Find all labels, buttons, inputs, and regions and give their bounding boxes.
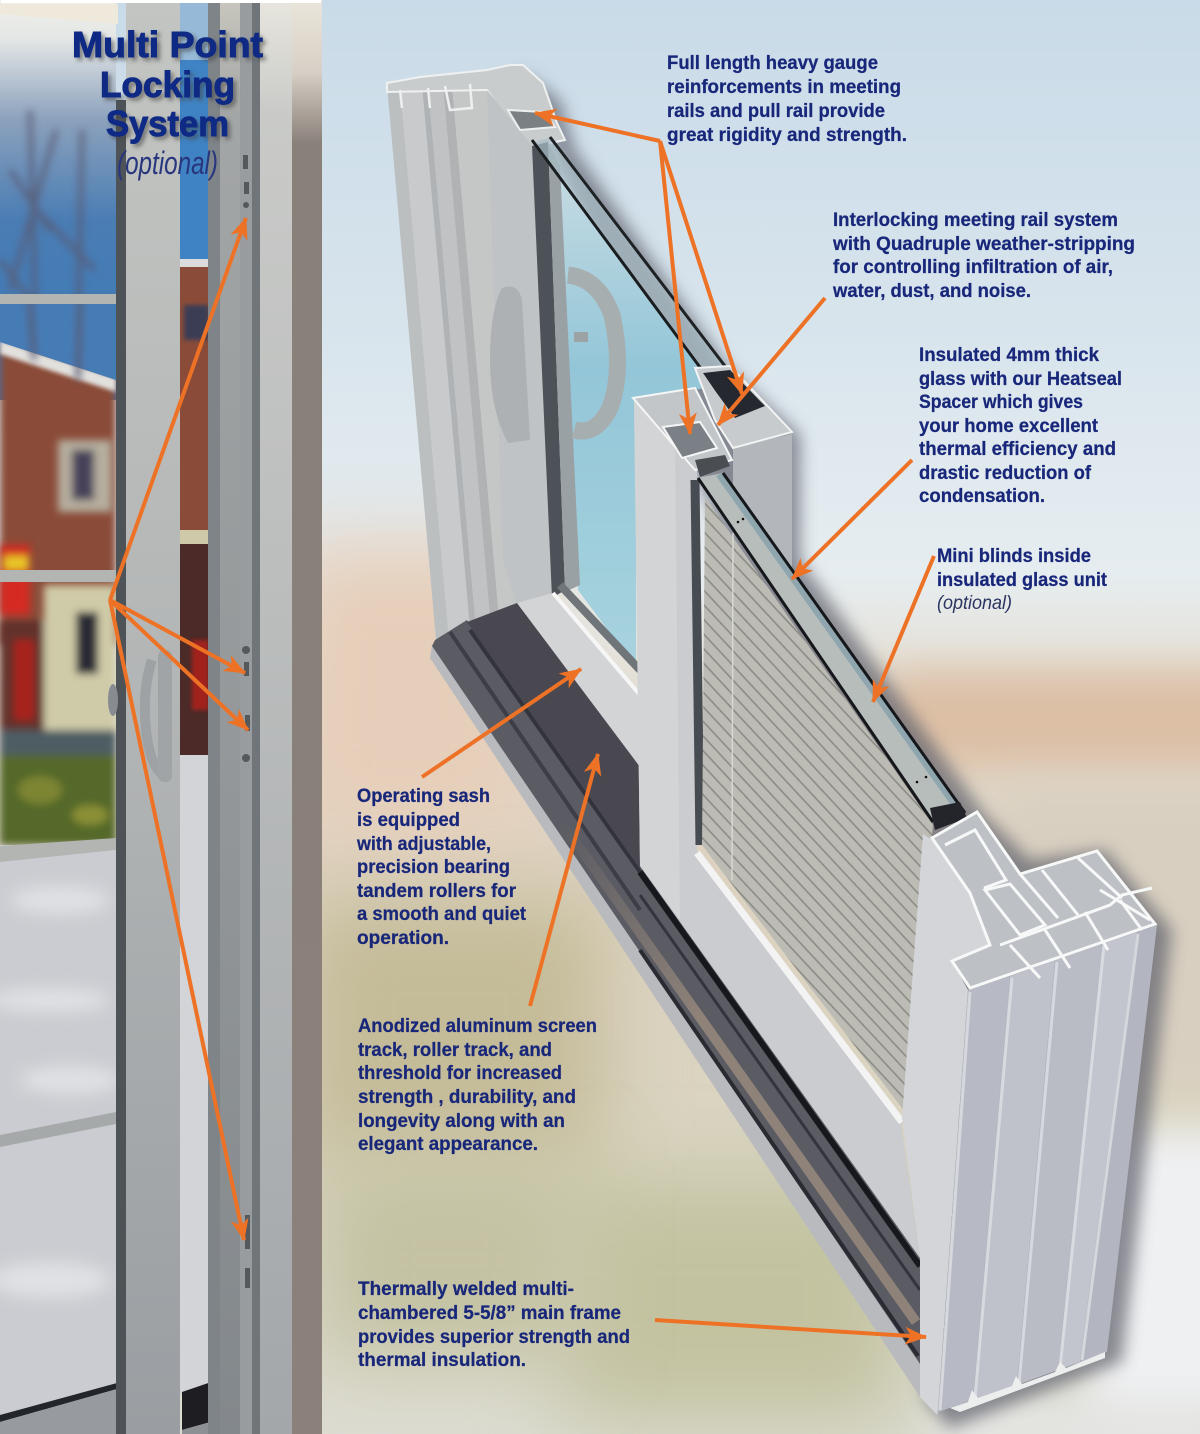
text: mini blinds: insulated glass unit <box>937 569 1107 591</box>
title: Multi Point Locking System: System <box>109 106 232 147</box>
text: insulated glass: your home excellent <box>919 415 1098 437</box>
meeting rail block <box>695 366 792 572</box>
arrows: lock points <box>110 218 248 1240</box>
text: main frame: thermal insulation. <box>358 1349 526 1371</box>
text: tandem rollers: tandem rollers for <box>357 880 516 902</box>
arrows: reinforcements <box>535 113 742 434</box>
text: tandem rollers: a smooth and quiet <box>357 903 526 925</box>
text: mini blinds <box>937 545 1107 614</box>
title: Multi Point Locking System: (optional) <box>117 145 218 181</box>
outdoor scene behind door <box>0 0 120 1434</box>
text: aluminum track: threshold for increased <box>358 1062 562 1084</box>
arrow: aluminum track <box>530 754 598 1006</box>
text: interlocking meeting rail <box>832 209 1135 302</box>
text: aluminum track: Anodized aluminum screen <box>358 1015 597 1037</box>
text: tandem rollers: operation. <box>357 927 449 949</box>
text: insulated glass: Spacer which gives <box>919 391 1083 413</box>
text: tandem rollers: Operating sash <box>357 785 490 807</box>
title: Multi Point Locking System: Locking <box>103 67 238 108</box>
text: main frame: Thermally welded multi- <box>358 1278 574 1300</box>
sill and aluminum tracks <box>430 603 920 1397</box>
text: insulated glass: Insulated 4mm thick <box>919 344 1099 366</box>
text: main frame: chambered 5-5/8” main frame <box>358 1302 621 1324</box>
text: interlocking meeting rail: with Quadruple weather-stripping <box>832 233 1135 255</box>
window grille bars <box>0 294 116 1147</box>
mini blinds in glass <box>702 497 933 1112</box>
text: mini blinds: Mini blinds inside <box>937 545 1091 567</box>
main frame thermal chamber profile <box>932 812 1155 988</box>
text: aluminum track: strength , durability, and <box>358 1086 576 1108</box>
text: insulated glass: drastic reduction of <box>919 462 1091 484</box>
text: aluminum track: longevity along with an <box>358 1110 565 1132</box>
text: reinforcements: great rigidity and strength. <box>667 124 907 146</box>
title: Multi Point Locking System: Multi Point <box>72 24 263 65</box>
text: mini blinds: (optional) <box>937 593 1012 614</box>
lock points <box>242 155 250 1288</box>
front sash stile and rail <box>633 388 920 1258</box>
title: Multi Point Locking System: Multi Point <box>75 27 266 68</box>
text: reinforcements <box>667 52 907 146</box>
arrow: insulated glass <box>792 460 912 579</box>
title: Multi Point Locking System: Locking <box>100 64 235 105</box>
text: tandem rollers <box>356 785 526 949</box>
text: tandem rollers: precision bearing <box>357 856 510 878</box>
text: insulated glass: thermal efficiency and <box>919 438 1116 460</box>
text: reinforcements: Full length heavy gauge <box>667 52 878 74</box>
text: reinforcements: reinforcements in meeting <box>667 76 901 98</box>
text: aluminum track: elegant appearance. <box>358 1133 538 1155</box>
text: insulated glass: glass with our Heatseal <box>919 368 1122 390</box>
text: tandem rollers: is equipped <box>357 809 460 831</box>
rear sash bottom rail <box>517 585 640 767</box>
arrow: main frame <box>655 1320 926 1337</box>
back handle set <box>490 275 618 443</box>
text: insulated glass <box>919 344 1122 507</box>
rear frame jamb <box>387 65 565 640</box>
text: main frame: provides superior strength and <box>358 1326 630 1348</box>
text: insulated glass: condensation. <box>919 485 1045 507</box>
text: interlocking meeting rail: Interlocking meeting rail system <box>833 209 1118 231</box>
rear sash stile <box>487 90 580 606</box>
text: aluminum track <box>358 1015 597 1155</box>
rear glass pane <box>556 168 705 668</box>
locking rail frame <box>1 0 322 1434</box>
arrow: interlocking meeting rail <box>718 298 825 425</box>
panel: multi point locking door photo <box>0 0 322 1434</box>
title: Multi Point Locking System: System <box>106 103 229 144</box>
door shadow <box>520 70 1172 1428</box>
sliding door cutaway <box>387 65 1157 1415</box>
door handle <box>108 650 172 782</box>
title: Multi Point Locking System <box>72 24 266 181</box>
text: interlocking meeting rail: for controlling infiltration of air, <box>833 256 1113 278</box>
arrow: tandem rollers <box>422 669 581 777</box>
text: main frame <box>358 1278 630 1371</box>
rear glass rail <box>532 137 728 370</box>
door stile <box>116 3 208 1434</box>
arrow: mini blinds <box>873 556 934 702</box>
right main frame face <box>902 834 1157 1415</box>
text: interlocking meeting rail: water, dust, and noise. <box>832 280 1031 302</box>
text: reinforcements: rails and pull rail provide <box>667 100 885 122</box>
text: aluminum track: track, roller track, and <box>358 1039 552 1061</box>
insulated glass edge band <box>695 455 967 830</box>
text: tandem rollers: with adjustable, <box>356 833 491 855</box>
